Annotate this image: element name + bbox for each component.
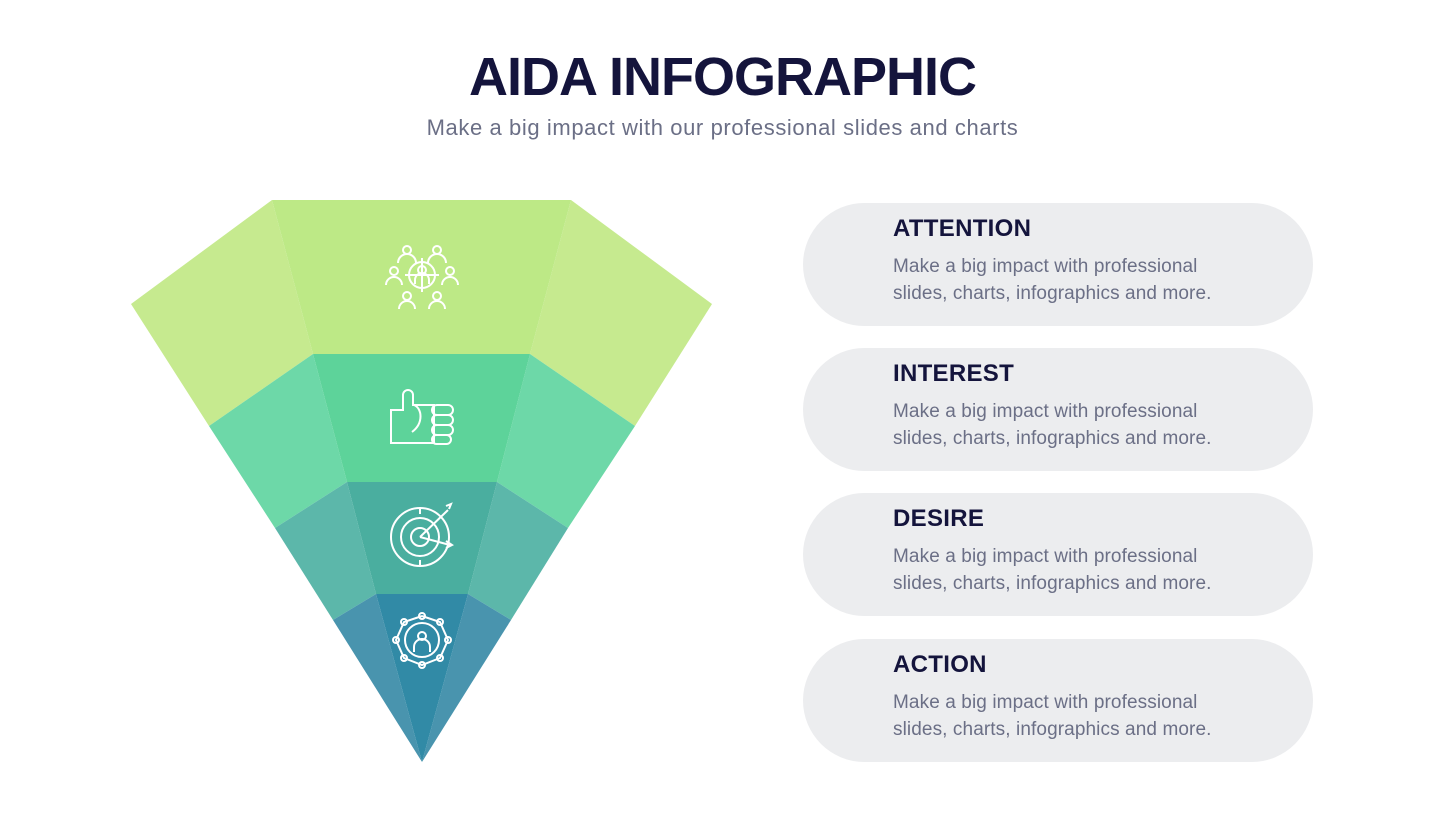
panel: interest [803,348,1313,471]
layer 2: interest [209,354,635,528]
panel: action [803,639,1313,762]
panel: attention [803,203,1313,326]
panel: desire: DESIRE [893,505,984,532]
panel: interest: Make a big impact with professional [893,401,1197,422]
panel: attention: ATTENTION [893,215,1031,242]
panel: interest: INTEREST [893,360,1014,387]
panel: action: Make a big impact with professional [893,692,1197,713]
subtitle: Make a big impact with our professional slides and charts [427,115,1018,140]
icon: people target [386,246,458,309]
panel: interest: slides, charts, infographics and more. [893,428,1212,449]
panel: attention: slides, charts, infographics and more. [893,283,1212,304]
icon: target [391,504,452,566]
panel: desire [803,493,1313,616]
layer 4: action [333,594,511,762]
icon: thumbs up [391,390,453,444]
layer 1: attention [131,200,712,426]
panel: action: slides, charts, infographics and more. [893,719,1212,740]
panel: attention: Make a big impact with professional [893,256,1197,277]
panel: desire: slides, charts, infographics and more. [893,573,1212,594]
panel: desire: Make a big impact with professional [893,546,1197,567]
panel: action: ACTION [893,651,987,678]
title: AIDA INFOGRAPHIC [469,47,976,107]
icon: network person [393,613,451,668]
layer 3: desire [275,482,568,620]
